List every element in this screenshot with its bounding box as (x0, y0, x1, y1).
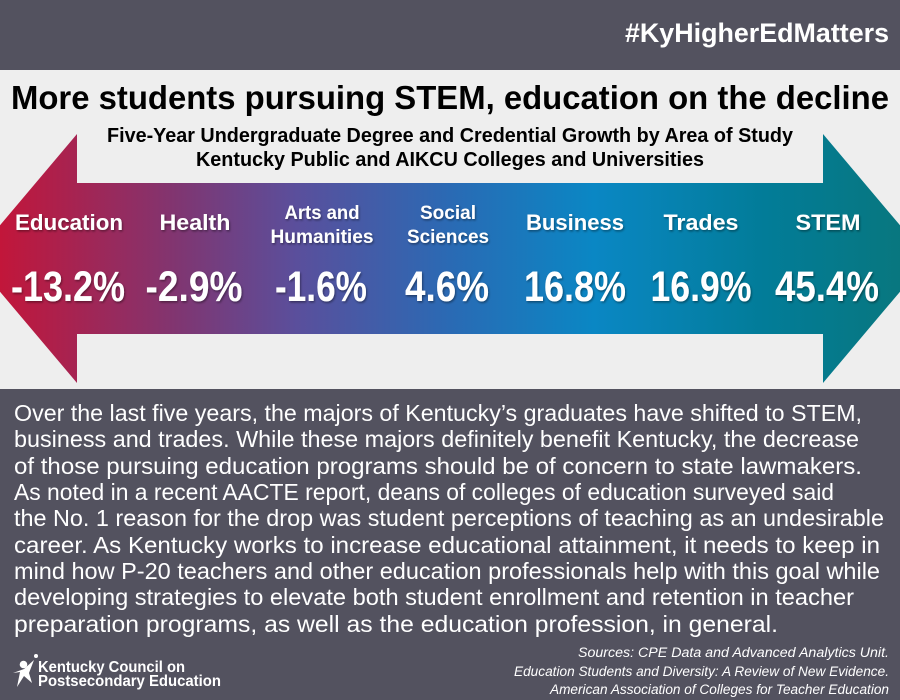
body paragraph: preparation programs, as well as the education profession, in general. (14, 611, 778, 637)
value: STEM: 45.4% (775, 263, 879, 311)
label: Arts and Humanities: Arts and (284, 202, 360, 224)
value: Trades: 16.9% (650, 263, 752, 311)
logo wordmark (38, 659, 221, 690)
value: Arts and Humanities: -1.6% (275, 263, 367, 311)
subtitle (107, 124, 794, 171)
label: Education: Education (15, 210, 123, 235)
label: Arts and Humanities: Humanities (270, 226, 374, 248)
logo wordmark: Kentucky Council on (38, 659, 185, 676)
sources (514, 645, 889, 697)
subtitle: Five-Year Undergraduate Degree and Credential Growth by Area of Study (107, 124, 794, 147)
lower band (0, 389, 900, 700)
body paragraph: developing strategies to elevate both student enrollment and retention in teacher (14, 584, 854, 610)
body paragraph: of those pursuing education programs should be of concern to state lawmakers. (14, 453, 862, 479)
logo wordmark: Postsecondary Education (38, 673, 221, 690)
label: Social Sciences (407, 202, 489, 248)
icon: figure reaching for star (13, 654, 38, 687)
label: Health: Health (160, 210, 230, 235)
title: More students pursuing STEM, education on the decline (11, 80, 889, 117)
sources: Sources: CPE Data and Advanced Analytics Unit. (578, 645, 889, 660)
label: Social Sciences: Social (420, 202, 476, 224)
area of study labels (15, 202, 860, 248)
body paragraph: As noted in a recent AACTE report, deans of colleges of education surveyed said (14, 479, 834, 505)
value: Business: 16.8% (524, 263, 626, 311)
body paragraph: mind how P-20 teachers and other education professionals help with this goal while (14, 558, 880, 584)
logo: Kentucky Council on Postsecondary Education (13, 654, 221, 690)
body paragraph: business and trades. While these majors definitely benefit Kentucky, the decrease (14, 426, 859, 452)
body paragraph: Over the last five years, the majors of Kentucky’s graduates have shifted to STEM, (14, 400, 862, 426)
value: Health: -2.9% (146, 263, 242, 311)
body paragraph: the No. 1 reason for the drop was student perceptions of teaching as an undesirable (14, 505, 884, 531)
body paragraph (14, 400, 884, 637)
label: Social Sciences: Sciences (407, 226, 489, 248)
subtitle: Kentucky Public and AIKCU Colleges and Universities (196, 148, 704, 171)
hashtag: #KyHigherEdMatters (625, 18, 889, 48)
label: STEM: STEM (796, 210, 860, 235)
double-headed gradient arrow (0, 134, 900, 383)
header band (0, 0, 900, 70)
percentage values (11, 263, 879, 311)
label: Arts and Humanities (270, 202, 374, 248)
value: Education: -13.2% (11, 263, 125, 311)
body paragraph: career. As Kentucky works to increase educational attainment, it needs to keep in (14, 532, 880, 558)
sources: Education Students and Diversity: A Review of New Evidence. (514, 664, 889, 679)
sources: American Association of Colleges for Teacher Education (549, 682, 889, 697)
value: Social Sciences: 4.6% (405, 263, 489, 311)
light central panel (0, 70, 900, 389)
label: Business: Business (526, 210, 624, 235)
label: Trades: Trades (664, 210, 738, 235)
